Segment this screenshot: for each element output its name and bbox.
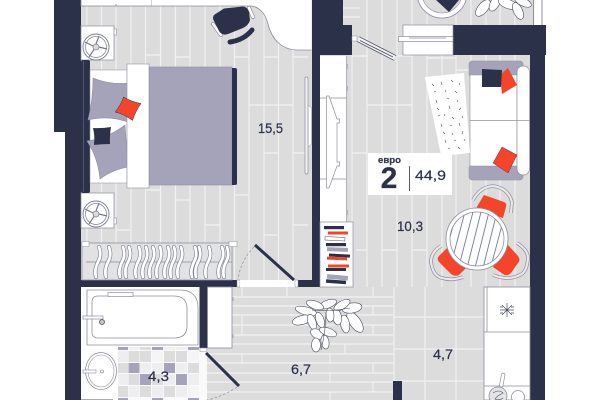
- chair: left: [438, 248, 467, 276]
- cushion: dark: [93, 127, 111, 145]
- area: bathroom: 4,3: [148, 368, 169, 384]
- living room door: [352, 36, 395, 58]
- sofa back: [517, 66, 530, 175]
- bed: [81, 60, 237, 193]
- shelf: top left: [81, 0, 152, 6]
- icon: snowflake: [500, 303, 514, 317]
- chair: right: [493, 245, 520, 275]
- chair back arcs: [431, 186, 528, 279]
- cushion: red: [115, 97, 141, 120]
- window: right balcony edge: [534, 0, 542, 25]
- balcony door: [398, 25, 453, 55]
- sofa: [469, 61, 530, 180]
- cushion: dark: [482, 69, 502, 87]
- cushion: red bottom: [493, 147, 517, 173]
- plant: hallway: [291, 297, 366, 352]
- area: living room: 10,3: [397, 218, 423, 234]
- sheet: [90, 70, 127, 183]
- sofa arm: bottom: [469, 165, 523, 180]
- area: hallway: 6,7: [291, 361, 311, 377]
- area: bedroom: 15,5: [258, 120, 283, 136]
- table top: [446, 208, 508, 270]
- sink: [81, 347, 118, 400]
- desk: [152, 0, 312, 50]
- sofa arm: top: [469, 61, 523, 77]
- label: euro: евро: [378, 155, 401, 166]
- floor: bedroom: [81, 0, 312, 280]
- kitchen counter: [484, 287, 530, 400]
- chair: top: [475, 195, 506, 218]
- rug: [426, 74, 469, 155]
- bedside table with fan: bottom: [81, 193, 116, 228]
- total area: 44,9: [415, 167, 446, 183]
- dining table with chairs: [431, 186, 528, 279]
- sofa seats: [470, 75, 517, 166]
- bathroom tile floor: [118, 347, 207, 400]
- TV unit: living room: [320, 56, 348, 222]
- bathroom door: [200, 348, 239, 400]
- floor: living room: [320, 55, 530, 287]
- bedroom door: [237, 245, 298, 287]
- number of rooms: 2: [381, 162, 397, 195]
- apartment label card: [368, 153, 452, 195]
- headboard: [81, 60, 90, 193]
- pillow: bottom: [87, 125, 128, 179]
- cushion: red top: [500, 68, 517, 94]
- icon: pan and burner: [489, 373, 524, 400]
- bedroom TV: [305, 77, 312, 174]
- pillow: top: [88, 78, 128, 122]
- floor: kitchen: [393, 287, 484, 400]
- plant: balcony: [473, 0, 533, 21]
- bed foot: [232, 68, 237, 185]
- bedside table with fan: top: [81, 26, 116, 60]
- area: kitchen: 4,7: [433, 346, 453, 362]
- round chair: balcony: [417, 0, 467, 18]
- duvet fold: [127, 64, 149, 188]
- bookshelf: [320, 222, 353, 287]
- hallway closet: [208, 287, 234, 348]
- floor: hallway: [207, 287, 393, 400]
- duvet: [149, 67, 232, 185]
- wardrobe: [82, 242, 237, 280]
- floor: balcony: [342, 0, 533, 55]
- icon: desk chair: [213, 6, 253, 42]
- bathtub: [81, 287, 200, 347]
